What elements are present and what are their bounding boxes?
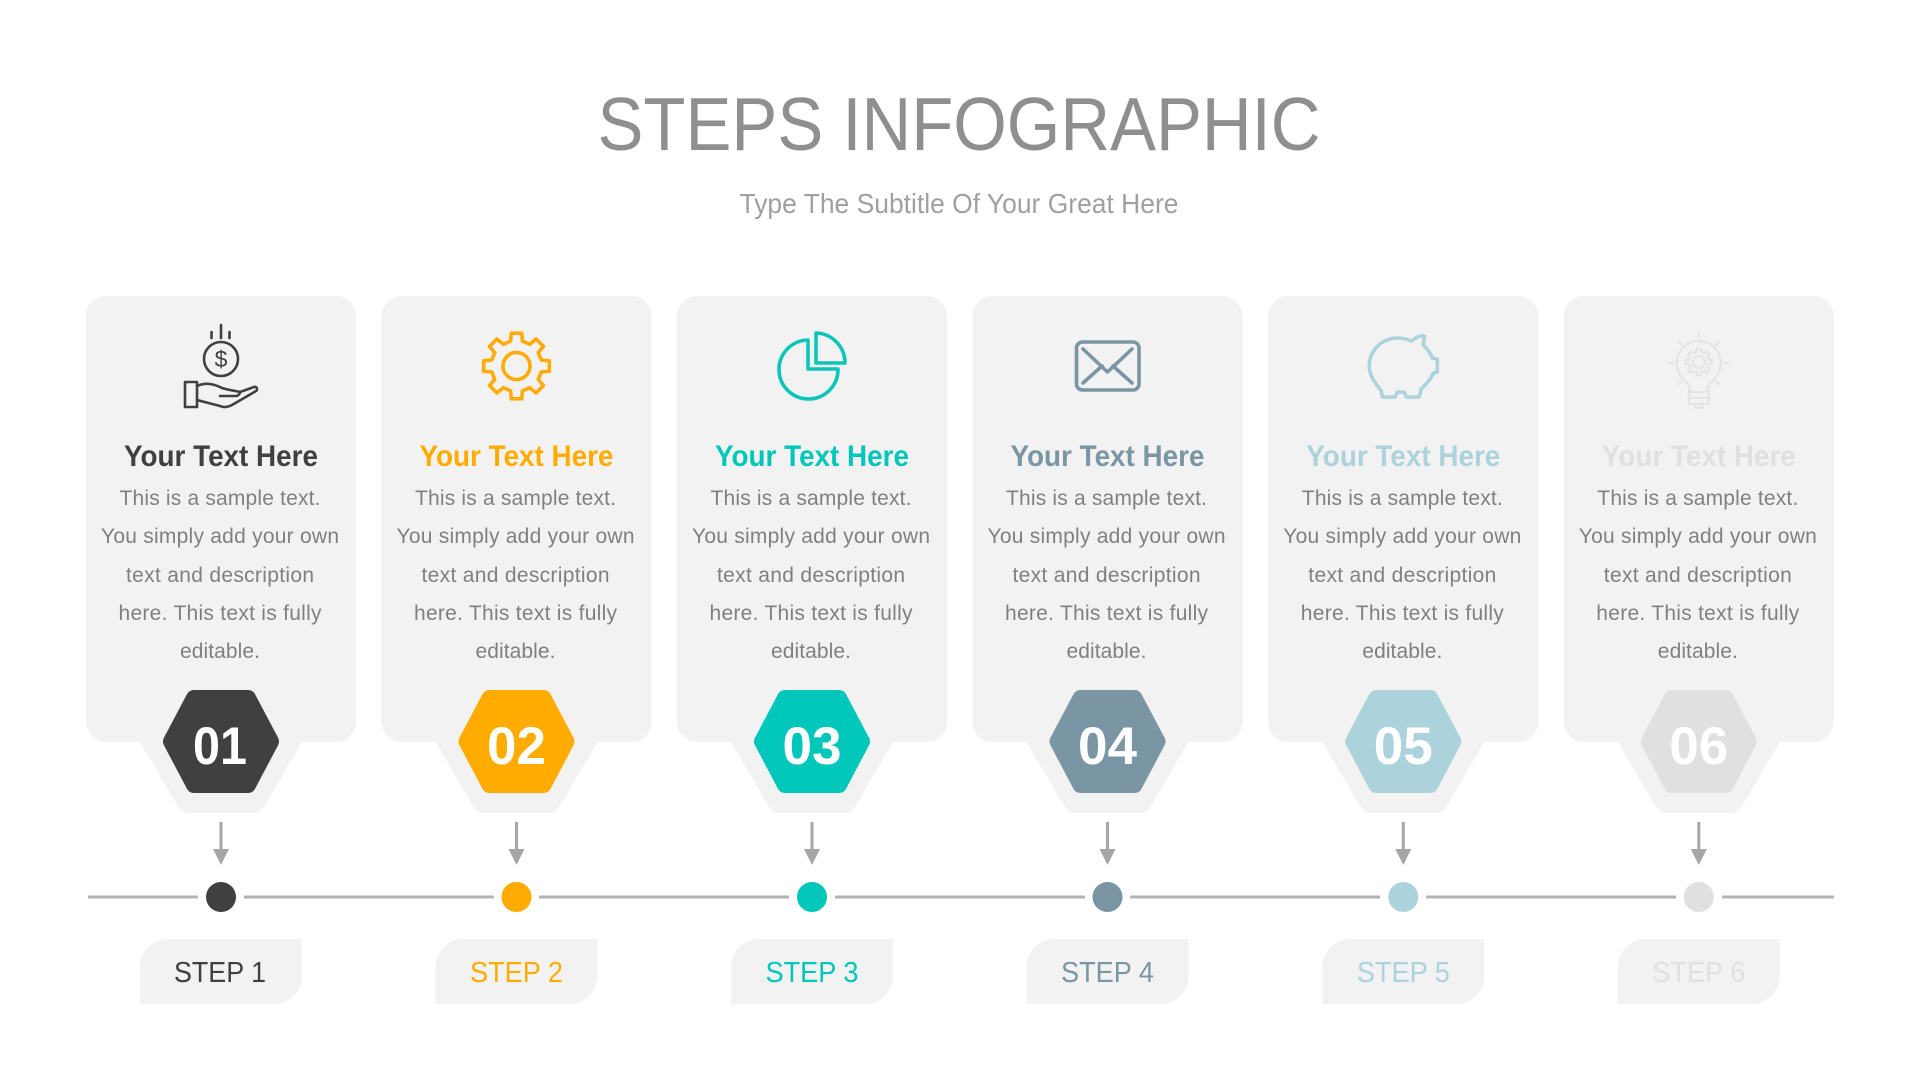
timeline dot xyxy=(797,882,827,912)
heading: Your Text Here xyxy=(1602,440,1796,473)
panel: step 3 xyxy=(677,296,947,1004)
description: You simply add your own xyxy=(988,525,1226,548)
description: This is a sample text. xyxy=(415,487,616,510)
step label xyxy=(731,939,893,1004)
timeline dot xyxy=(1388,882,1418,912)
number hexagon: 01 xyxy=(193,717,247,776)
heading: Your Text Here xyxy=(420,440,614,473)
description: This is a sample text. xyxy=(710,487,912,510)
icon: piggy bank xyxy=(1369,336,1437,397)
arrow xyxy=(213,822,229,865)
panel: step 5 xyxy=(1268,296,1538,1004)
step label: STEP 3 xyxy=(766,957,858,989)
timeline line xyxy=(88,896,1834,898)
description: You simply add your own xyxy=(692,525,930,548)
number hexagon: 05 xyxy=(1374,717,1433,776)
title: STEPS INFOGRAPHIC xyxy=(598,82,1320,166)
description: text and description xyxy=(126,564,314,587)
description: editable. xyxy=(180,640,260,663)
description: text and description xyxy=(1012,564,1200,587)
description: editable. xyxy=(1066,640,1146,663)
timeline dot xyxy=(206,882,236,912)
arrow xyxy=(1100,822,1116,865)
description xyxy=(101,487,339,663)
heading: Your Text Here xyxy=(124,440,318,473)
description xyxy=(1283,487,1521,663)
step label: STEP 4 xyxy=(1061,957,1154,989)
description: here. This text is fully xyxy=(1005,602,1208,625)
arrow xyxy=(1395,822,1411,865)
card xyxy=(382,296,652,813)
description: editable. xyxy=(771,640,851,663)
step label xyxy=(1618,939,1780,1004)
panel: step 4 xyxy=(972,296,1242,1004)
description: This is a sample text. xyxy=(1597,487,1798,510)
card xyxy=(86,296,356,813)
number hexagon xyxy=(1649,698,1749,785)
description xyxy=(1579,487,1817,663)
step label xyxy=(140,939,302,1004)
card xyxy=(972,296,1242,813)
description: here. This text is fully xyxy=(414,602,618,625)
number hexagon: 06 xyxy=(1669,717,1728,776)
description: You simply add your own xyxy=(1283,525,1521,548)
step label xyxy=(1026,939,1188,1004)
icon: light bulb with gear xyxy=(1669,333,1729,408)
description: here. This text is fully xyxy=(118,602,322,625)
description: This is a sample text. xyxy=(1302,487,1503,510)
card xyxy=(1564,296,1834,813)
description: here. This text is fully xyxy=(1301,602,1504,625)
step label: STEP 2 xyxy=(470,957,563,989)
number hexagon: 02 xyxy=(487,717,546,776)
panel: step 2 xyxy=(382,296,652,1004)
description: You simply add your own xyxy=(101,525,339,548)
description: text and description xyxy=(1604,564,1792,587)
number hexagon xyxy=(466,698,566,785)
number hexagon: 03 xyxy=(782,717,842,776)
timeline dot xyxy=(1092,882,1122,912)
arrow xyxy=(508,822,524,865)
description: editable. xyxy=(476,640,556,663)
description: This is a sample text. xyxy=(120,487,320,510)
heading: Your Text Here xyxy=(715,440,909,473)
description: here. This text is fully xyxy=(1596,602,1800,625)
arrow xyxy=(1691,822,1707,865)
description: text and description xyxy=(1308,564,1496,587)
timeline dot xyxy=(502,882,532,912)
step label xyxy=(1322,939,1484,1004)
icon: pie chart xyxy=(779,333,845,399)
description: You simply add your own xyxy=(396,525,634,548)
heading: Your Text Here xyxy=(1306,440,1500,473)
step label xyxy=(436,939,598,1004)
heading: Your Text Here xyxy=(1010,440,1204,473)
card xyxy=(1268,296,1538,813)
step label: STEP 1 xyxy=(174,957,266,989)
step label: STEP 6 xyxy=(1652,957,1745,989)
icon: coin over hand xyxy=(185,325,257,407)
icon: gear xyxy=(484,333,549,399)
number hexagon: 04 xyxy=(1078,717,1138,776)
description xyxy=(988,487,1226,663)
timeline dot xyxy=(1684,882,1714,912)
card xyxy=(677,296,947,813)
description: here. This text is fully xyxy=(710,602,913,625)
number hexagon xyxy=(171,698,271,785)
description xyxy=(692,487,930,663)
description: text and description xyxy=(717,564,905,587)
panel: step 1 xyxy=(86,296,356,1004)
number hexagon xyxy=(762,698,862,785)
number hexagon xyxy=(1353,698,1453,785)
icon: envelope xyxy=(1076,342,1139,390)
arrow xyxy=(804,822,820,865)
subtitle: Type The Subtitle Of Your Great Here xyxy=(740,188,1178,219)
description: You simply add your own xyxy=(1579,525,1817,548)
description: This is a sample text. xyxy=(1006,487,1207,510)
description: editable. xyxy=(1362,640,1442,663)
panel: step 6 xyxy=(1564,296,1834,1004)
description: text and description xyxy=(422,564,610,587)
number hexagon xyxy=(1058,698,1158,785)
description: editable. xyxy=(1658,640,1738,663)
step label: STEP 5 xyxy=(1357,957,1450,989)
icon: coin over hand: $ xyxy=(215,346,228,372)
description xyxy=(396,487,634,663)
